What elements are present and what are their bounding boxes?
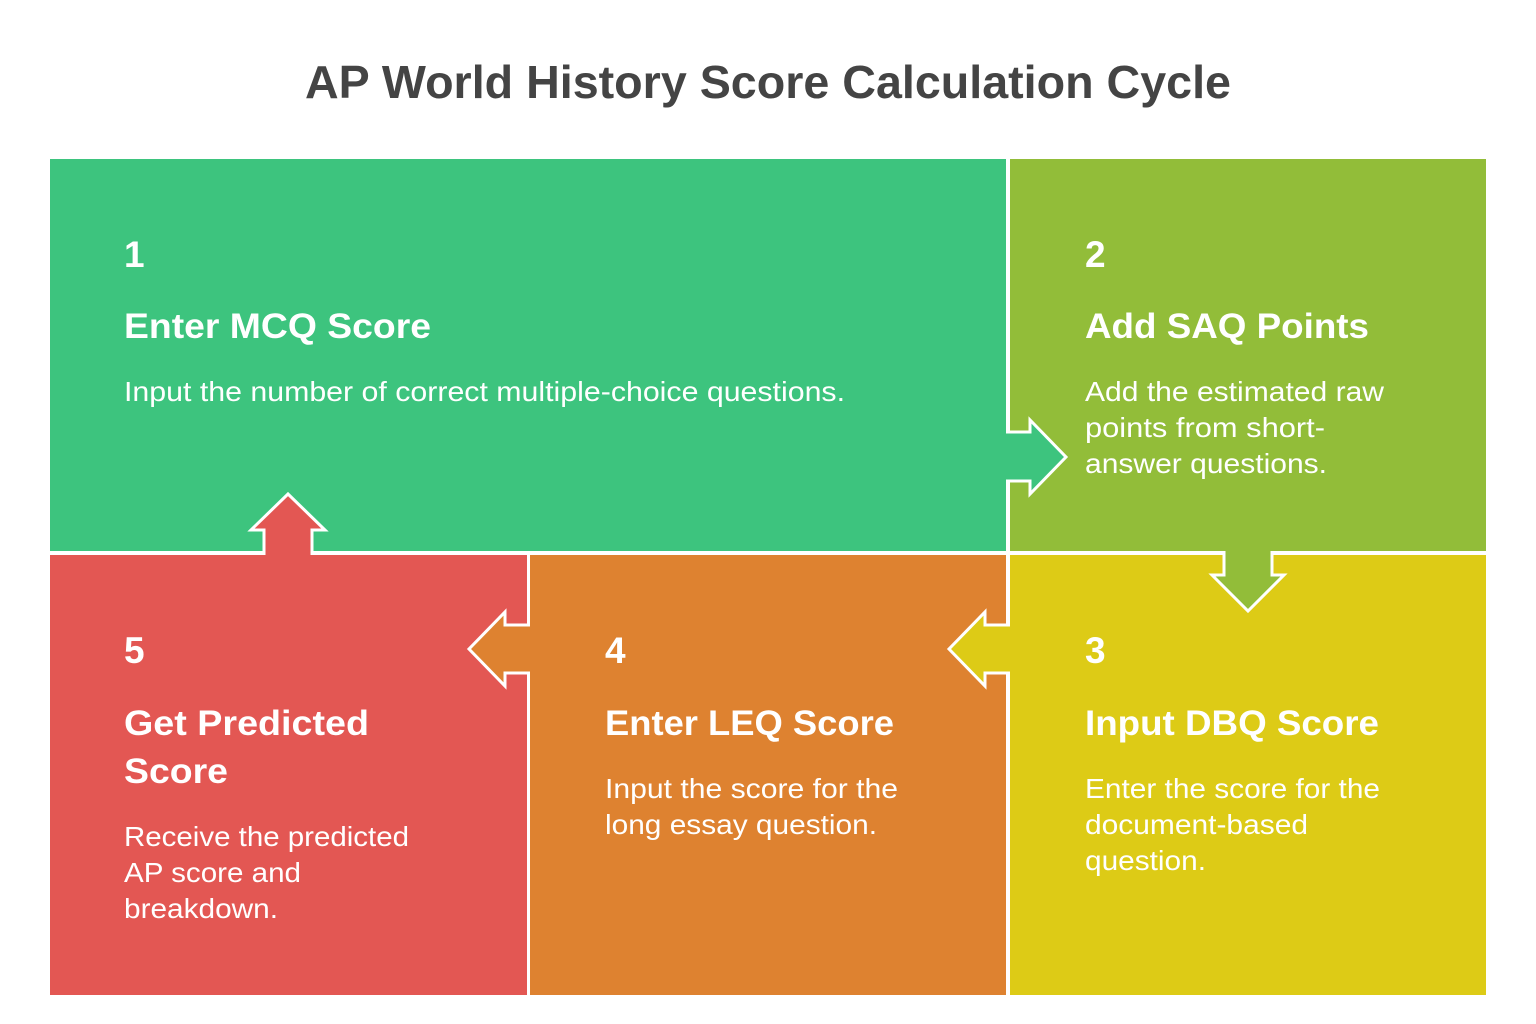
panel: 5 get predicted score: breakdown. [124, 893, 278, 924]
panel: 5 get predicted score: 5 [124, 630, 145, 671]
panel: 3 input DBQ score: document-based [1085, 809, 1308, 840]
panel: 1 enter MCQ score: 1 [124, 234, 145, 275]
panel: 5 get predicted score: Score [124, 752, 228, 791]
panel: 2 add SAQ points: points from short- [1085, 412, 1325, 443]
panel: 2 add SAQ points: answer questions. [1085, 448, 1327, 479]
arrow: 3 to 4 [949, 612, 1014, 686]
arrow: 5 to 1 [251, 494, 325, 559]
panel: 2 add SAQ points: 2 [1085, 234, 1106, 275]
arrow: 4 to 5 [469, 612, 534, 686]
panel: 3 input DBQ score: Input DBQ Score [1085, 704, 1379, 743]
panel: 4 enter LEQ score: Enter LEQ Score [605, 704, 894, 743]
panel: 1 enter MCQ score: Enter MCQ Score [124, 307, 431, 346]
panel: 5 get predicted score: Get Predicted [124, 704, 369, 743]
arrow: 1 to 2 [1002, 420, 1066, 494]
panel: 3 input DBQ score: 3 [1085, 630, 1106, 671]
panel: 3 input DBQ score: question. [1085, 845, 1206, 876]
panel: 1 enter MCQ score [50, 159, 1006, 551]
panel: 3 input DBQ score: Enter the score for the [1085, 773, 1380, 804]
panel: 1 enter MCQ score: Input the number of correct multiple-choice questions. [124, 376, 845, 407]
panel: 5 get predicted score [50, 555, 527, 995]
panel: 2 add SAQ points: Add SAQ Points [1085, 307, 1369, 346]
title: AP World History Score Calculation Cycle [305, 56, 1231, 108]
panel: 4 enter LEQ score [530, 555, 1006, 995]
panel: 4 enter LEQ score: Input the score for the [605, 773, 898, 804]
panel: 4 enter LEQ score: long essay question. [605, 809, 877, 840]
panel: 2 add SAQ points [1010, 159, 1486, 551]
panel: 3 input DBQ score [1010, 555, 1486, 995]
panel: 5 get predicted score: Receive the predicted [124, 821, 409, 852]
panel: 5 get predicted score: AP score and [124, 857, 301, 888]
panel: 4 enter LEQ score: 4 [605, 630, 626, 671]
panel: 2 add SAQ points: Add the estimated raw [1085, 376, 1385, 407]
arrow: 2 to 3 [1212, 547, 1284, 611]
